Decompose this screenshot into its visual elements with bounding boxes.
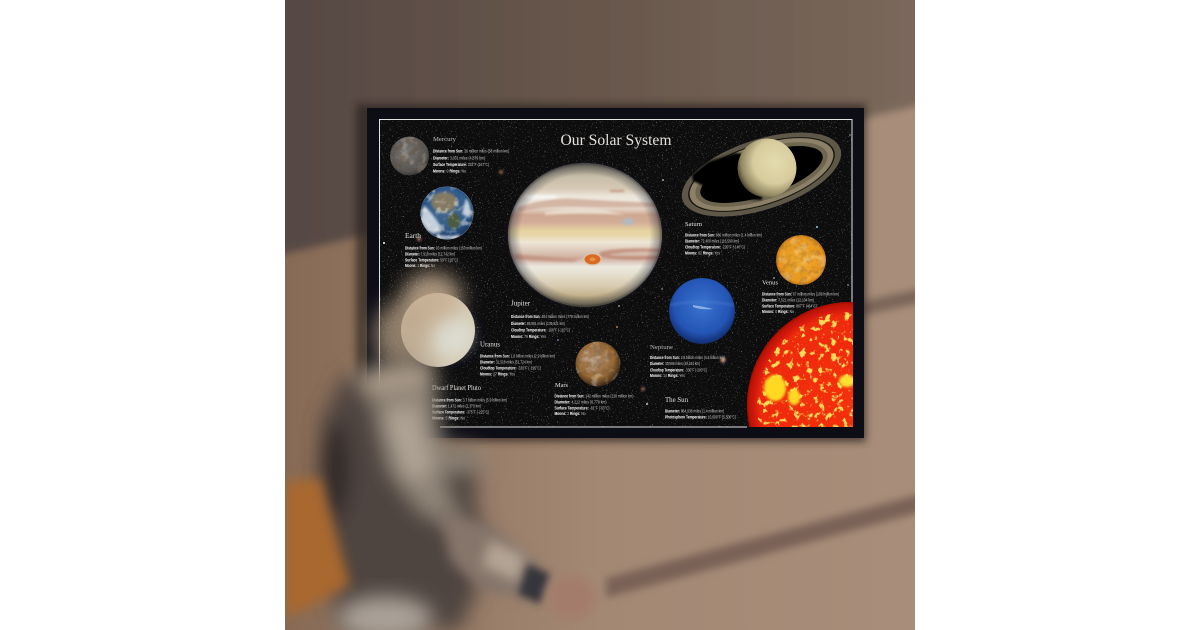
label: Earth: Distance from Sun: 93 million miles (150 million km) <box>405 246 482 250</box>
label: Dwarf Planet Pluto: Distance from Sun: 3.7 billion miles (5.9 billion km) <box>432 398 507 402</box>
label: Mercury: Diameter: 3,031 miles (4,879 km) <box>433 156 485 160</box>
label: Neptune <box>650 344 725 378</box>
label: Earth: Moons: 1 Rings: No <box>405 263 435 268</box>
label: Mercury: Surface Temperature: 333°F (167°C) <box>433 162 489 167</box>
label: Uranus: Diameter: 31,518 miles (51,724 km) <box>480 360 532 364</box>
wall background <box>285 0 915 630</box>
arm <box>440 510 540 600</box>
blurred astronaut in foreground <box>285 272 596 630</box>
poster frame <box>367 108 864 438</box>
label: Venus: Surface Temperature: 867°F (464°C) <box>762 304 817 308</box>
poster shadow <box>356 104 866 442</box>
planet: Sun <box>747 302 853 427</box>
label: Venus: Diameter: 7,521 miles (12,104 km) <box>762 298 814 302</box>
planet: Saturn <box>682 132 842 216</box>
label: Saturn <box>685 221 762 256</box>
label: Jupiter <box>511 300 589 339</box>
leg <box>337 596 433 630</box>
label: The Sun <box>665 397 736 420</box>
label: Jupiter: Cloudtop Temperature: -166°F (-110°C) <box>511 328 570 332</box>
label: Saturn: Cloudtop Temperature: -220°F (-140°C) <box>685 244 745 250</box>
label: Uranus <box>480 342 555 376</box>
poster <box>367 108 864 438</box>
label: Mercury: Moons: 0 Rings: No <box>433 169 466 174</box>
planet: Uranus <box>401 293 475 367</box>
label: Venus: Venus <box>762 280 779 286</box>
label: Dwarf Planet Pluto: Surface Temperature: -375°F (-225°C) <box>432 410 489 414</box>
label: Uranus: Uranus <box>480 342 500 348</box>
label: Dwarf Planet Pluto <box>432 385 507 420</box>
label: Mercury: Mercury <box>433 136 457 143</box>
planet: Venus <box>776 235 826 285</box>
label: Mars: Surface Temperature: -81°F (-63°C) <box>554 406 610 410</box>
label: Dwarf Planet Pluto: Diameter: 1,472 miles (2,370 km) <box>432 404 481 408</box>
label: Neptune: Distance from Sun: 2.8 billion miles (4.5 billion km) <box>650 355 725 360</box>
backpack <box>285 478 350 615</box>
planet: Jupiter <box>508 163 662 307</box>
label: The Sun: Photosphere Temperature: 10,000°F (5,500°C) <box>665 414 736 420</box>
starfield background <box>380 120 852 427</box>
label: Neptune: Cloudtop Temperature: -330°F (-200°C) <box>650 368 707 372</box>
label: Mars: Diameter: 4,212 miles (6,779 km) <box>554 400 607 404</box>
label: Dwarf Planet Pluto: Moons: 5 Rings: No <box>432 416 465 420</box>
label: The Sun: Diameter: 864,938 miles (1.4 million km) <box>665 408 724 414</box>
label: The Sun: The Sun <box>665 397 689 404</box>
hand <box>542 580 594 616</box>
label: Saturn: Moons: 82 Rings: Yes <box>685 250 720 256</box>
label: Mars: Mars <box>555 382 569 389</box>
planet: Mars <box>575 341 621 387</box>
label: Venus: Distance from Sun: 67 million miles (108 million km) <box>762 292 839 296</box>
label: Earth: Surface Temperature: 59°F (15°C) <box>405 258 458 262</box>
label: Earth: Diameter: 7,918 miles (12,742 km) <box>405 252 455 256</box>
label: Venus <box>762 280 839 314</box>
label: Neptune: Diameter: 30,598 miles (49,244 km) <box>650 361 700 366</box>
label: Mars <box>554 382 634 416</box>
label: Mars: Distance from Sun: 142 million miles (228 million km) <box>554 394 634 398</box>
label: Venus: Moons: 0 Rings: No <box>762 309 794 314</box>
label: Dwarf Planet Pluto: Dwarf Planet Pluto <box>432 385 482 392</box>
title: Our Solar System <box>560 132 672 149</box>
label: Neptune: Neptune <box>650 344 673 351</box>
label: Jupiter: Diameter: 88,881 miles (139,821 km) <box>511 321 565 326</box>
white border line <box>380 120 852 427</box>
label: Saturn: Distance from Sun: 886 million miles (1.4 billion km) <box>685 232 762 238</box>
label: Neptune: Moons: 14 Rings: Yes <box>650 373 685 378</box>
label: Uranus: Distance from Sun: 1.8 billion miles (2.9 billion km) <box>480 354 555 358</box>
wrist band <box>518 564 550 604</box>
planet: Earth <box>420 186 474 240</box>
label: Jupiter: Distance from Sun: 484 million miles (778 million km) <box>511 314 589 319</box>
label: Mars: Moons: 2 Rings: No <box>554 411 586 416</box>
label: Mercury: Distance from Sun: 36 million miles (58 million km) <box>433 148 509 154</box>
label: Earth <box>405 233 482 268</box>
label: Saturn: Saturn <box>685 221 703 228</box>
helmet <box>374 272 462 369</box>
label: Mercury <box>433 136 509 174</box>
torso <box>318 356 490 630</box>
label: Uranus: Moons: 27 Rings: Yes <box>480 372 515 376</box>
planet: Neptune <box>669 278 735 344</box>
label: Jupiter: Moons: 79 Rings: Yes <box>511 334 546 339</box>
label: Saturn: Diameter: 72,400 miles (116,500 km) <box>685 238 739 244</box>
label: Jupiter: Jupiter <box>511 300 531 308</box>
label: Uranus: Cloudtop Temperature: -320°F (-195°C) <box>480 366 541 370</box>
label: Earth: Earth <box>405 233 422 240</box>
planet: Mercury <box>390 136 430 176</box>
